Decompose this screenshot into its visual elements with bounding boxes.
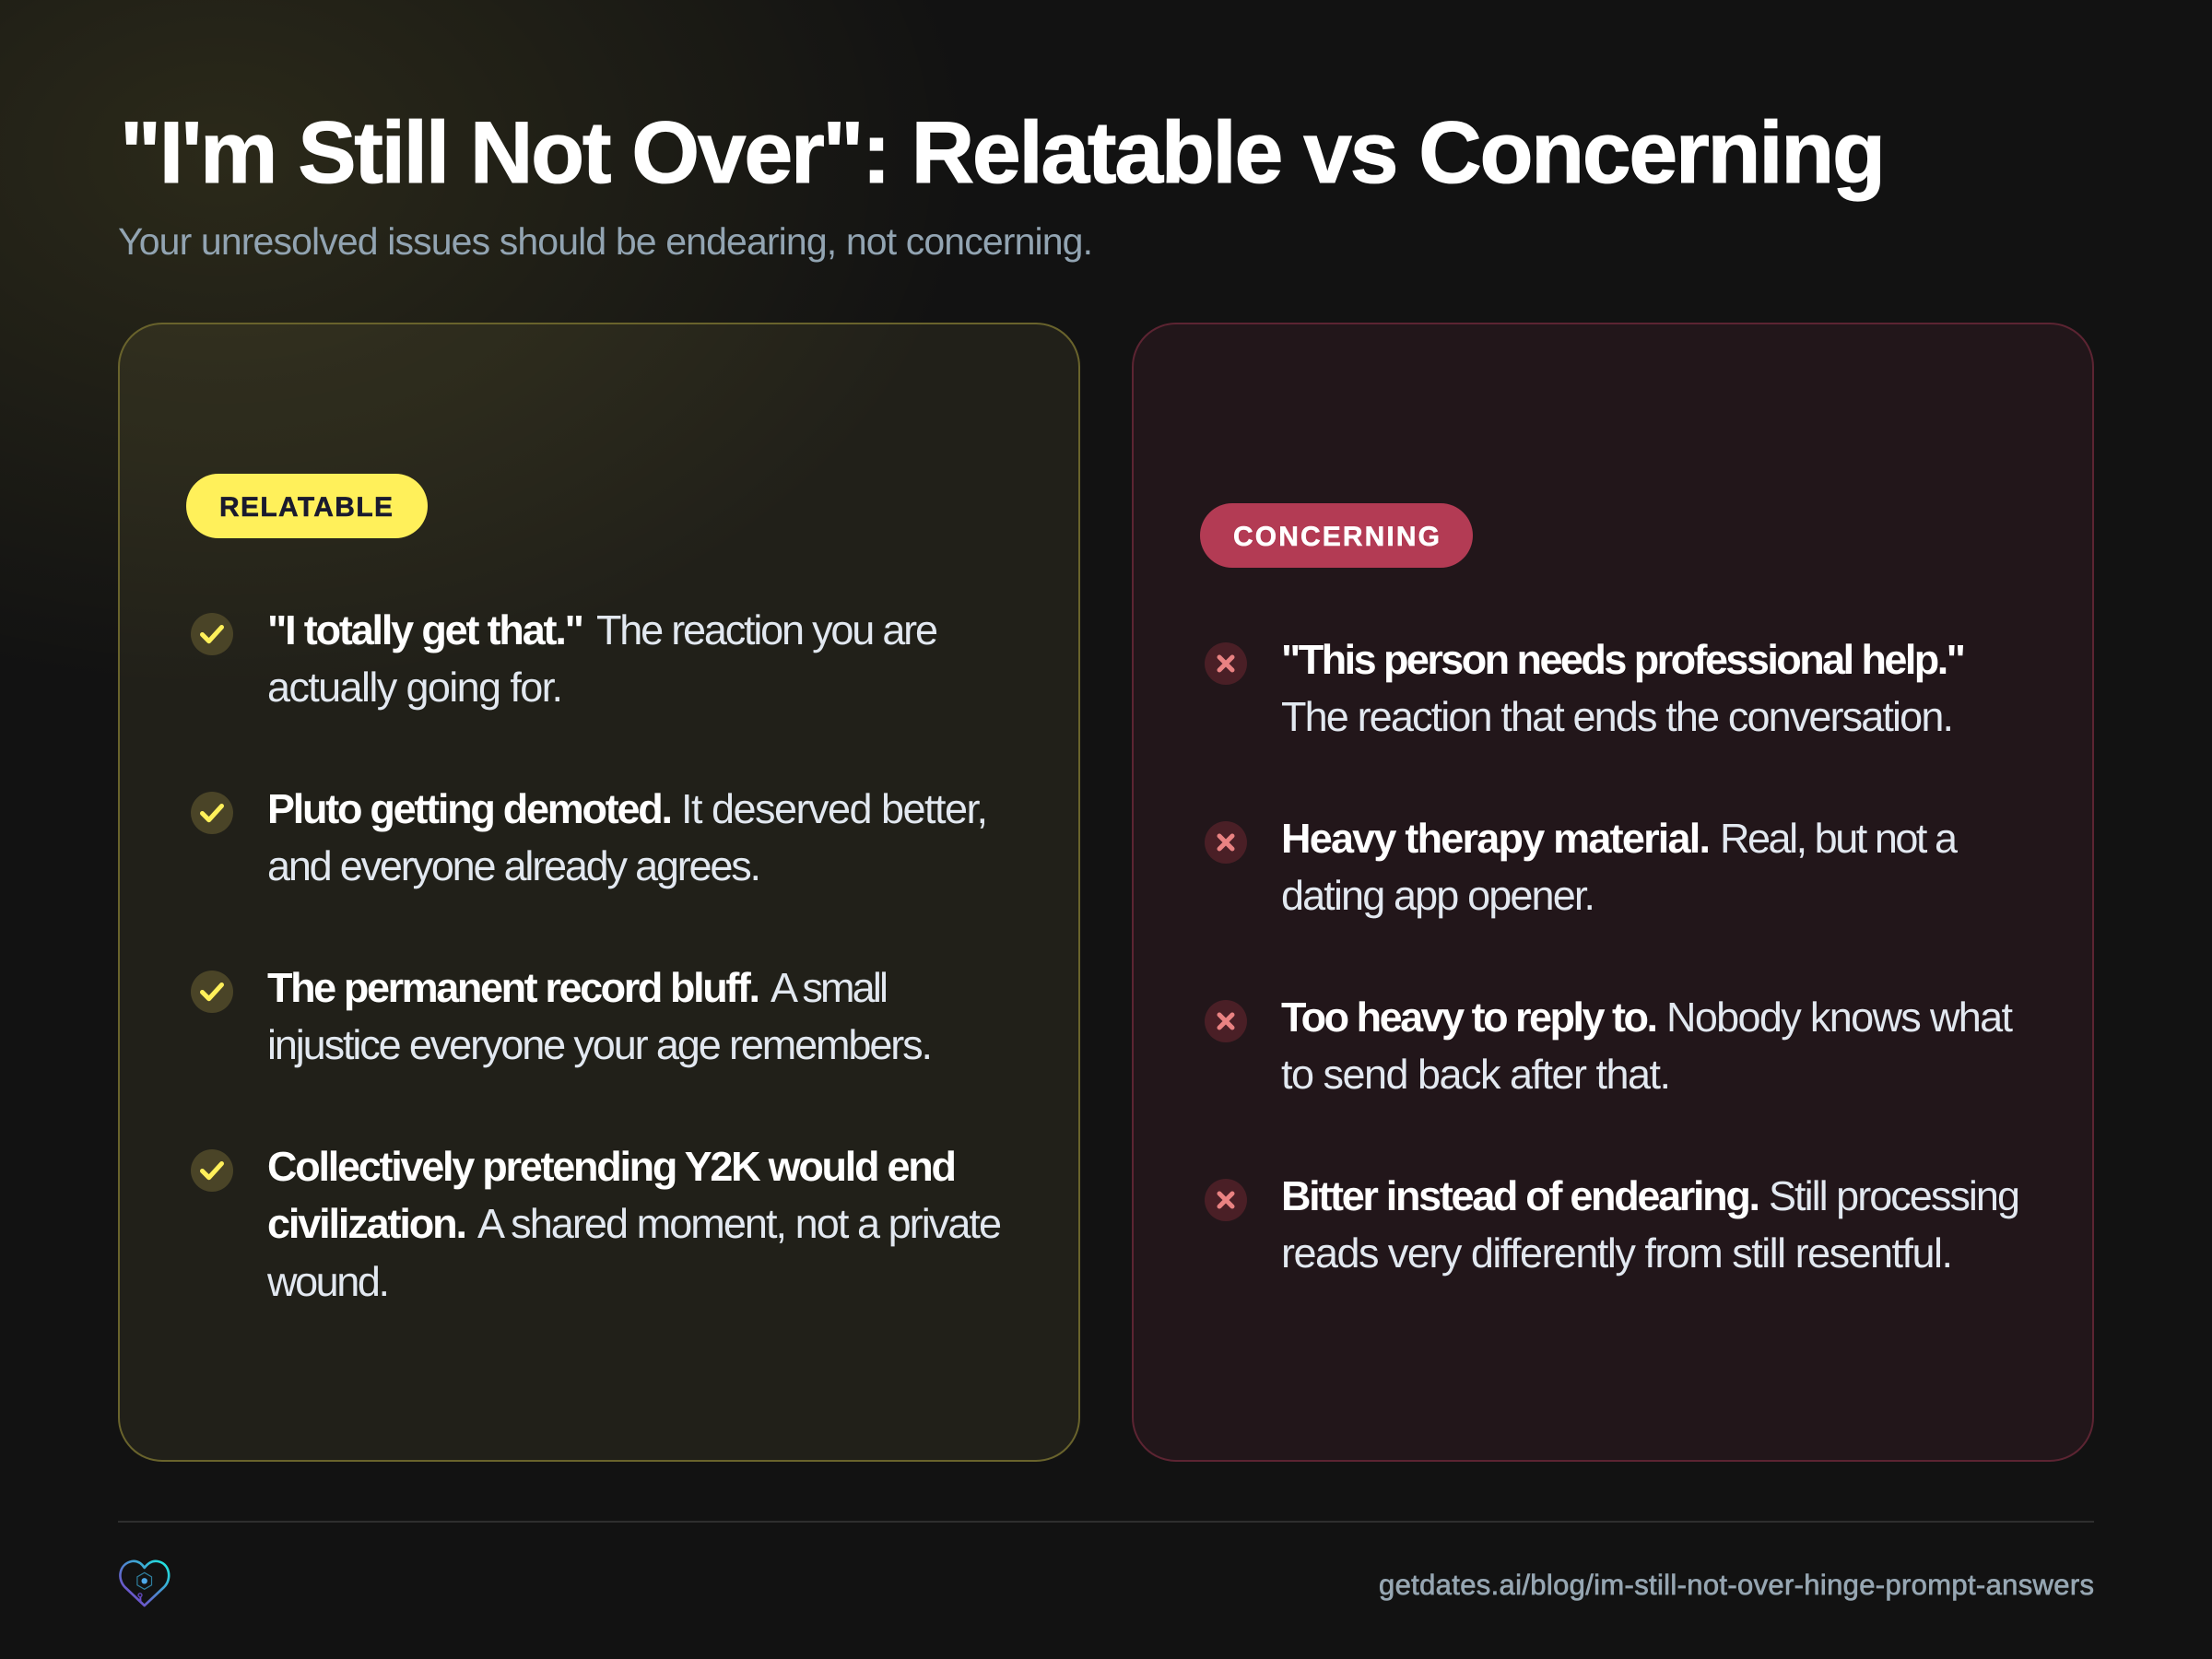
item text [1281,815,1959,919]
item text [267,606,938,711]
item text: reads very differently from still resentful. [1281,1230,1953,1277]
item text [266,1143,1002,1305]
icon: check [191,1149,233,1192]
item text [1281,636,1966,740]
item text: Pluto getting demoted. [267,785,673,832]
badge: concerning [1200,503,1473,568]
icon: cross [1205,642,1247,685]
footer url: getdates.ai/blog/im-still-not-over-hinge-prompt-answers [1379,1569,2094,1601]
item: Collectively pretending Y2K [191,1143,1002,1305]
item text: Nobody knows what [1666,994,2013,1041]
subtitle: Your unresolved issues should be endearing, not concerning. [118,220,1093,263]
badge: relatable [186,474,428,538]
item text: wound. [266,1258,390,1305]
item text: The permanent record bluff. [267,964,760,1011]
panel: relatable [119,324,1079,1461]
panel: concerning [1133,324,2093,1461]
badge: concerning: CONCERNING [1233,522,1440,552]
item text: dating app opener. [1281,872,1595,919]
item text: Real, but not a [1720,815,1959,862]
icon: check [191,971,233,1013]
title: "I'm Still Not Over": Relatable vs Concerning [120,104,1886,202]
item text: civilization. [267,1200,467,1247]
item: Pluto getting demoted [191,785,988,889]
item text [1281,994,2013,1098]
panel background [119,324,1079,1461]
item: Heavy therapy material [1205,815,1959,919]
icon: heart logo [120,1561,169,1606]
item text [267,964,933,1068]
item text [1281,1172,2020,1277]
item text: "I totally get that." [267,606,584,653]
panel background [1133,324,2093,1461]
item text: A small [771,964,888,1011]
item text: actually going for. [267,664,563,711]
item: I totally get that [191,606,938,711]
item text: A shared moment, not a private [477,1200,1002,1247]
item text: Collectively pretending Y2K would end [267,1143,957,1190]
item text: Too heavy to reply to. [1281,994,1658,1041]
icon: cross [1205,1179,1247,1221]
item: The permanent record bluff [191,964,933,1068]
badge: relatable: RELATABLE [219,492,393,523]
item text: Heavy therapy material. [1281,815,1711,862]
item text [267,785,988,889]
icon: cross [1205,1000,1247,1042]
item text: to send back after that. [1281,1051,1671,1098]
item text: Bitter instead of endearing. [1281,1172,1760,1219]
item text: injustice everyone your age remembers. [267,1021,933,1068]
icon: cross [1205,821,1247,864]
item text: It deserved better, [681,785,988,832]
icon: check [191,613,233,655]
item text: The reaction that ends the conversation. [1281,693,1954,740]
item: Bitter instead of endearing [1205,1172,2020,1277]
icon: check [191,792,233,834]
item text: Still processing [1769,1172,2020,1219]
item: Too heavy to reply to [1205,994,2013,1098]
item text: "This person needs professional help." [1281,636,1966,683]
item text: and everyone already agrees. [267,842,761,889]
item text: The reaction you are [596,606,938,653]
item: This person needs professional help [1205,636,1966,740]
